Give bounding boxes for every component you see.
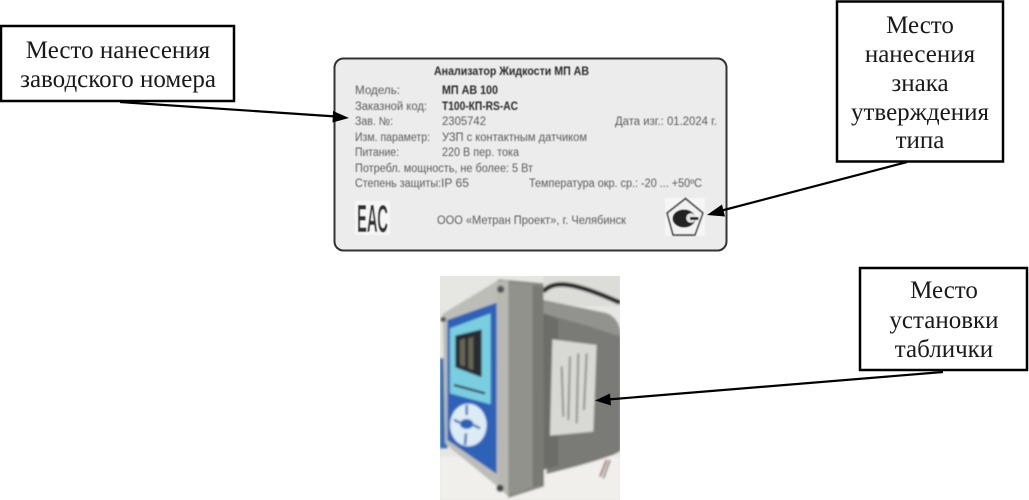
nameplate text: Модель: — [355, 85, 400, 97]
callout: serial number location: заводского номера — [20, 66, 216, 93]
nameplate text: 2305742 — [442, 116, 486, 128]
callout: type approval mark location: утверждения — [851, 99, 990, 126]
nameplate text: ООО «Метран Проект», г. Челябинск — [437, 215, 627, 227]
blue front — [447, 303, 497, 474]
panel: nameplate — [334, 58, 726, 250]
callout: type approval mark location: знака — [891, 70, 949, 97]
device body — [543, 300, 621, 474]
nameplate text: Изм. параметр: — [355, 132, 430, 144]
callout: plate installation location — [860, 268, 1027, 370]
arrow: to approval mark — [707, 162, 907, 216]
callout: type approval mark location: Место — [886, 12, 954, 39]
bezel — [442, 280, 500, 487]
nameplate text: Степень защиты: — [355, 178, 441, 190]
screen — [455, 329, 482, 377]
callout: plate installation location: Место — [910, 277, 978, 304]
side frame — [498, 279, 544, 498]
wires — [600, 460, 607, 477]
label on device — [550, 339, 597, 436]
nameplate text: Т100-КП-RS-AC — [442, 101, 518, 113]
left neighbour — [440, 358, 447, 448]
nameplate text: Питание: — [355, 147, 399, 159]
nameplate text: Потребл. мощность, не более: 5 Вт — [355, 163, 534, 175]
nameplate text: Дата изг.: 01.2024 г. — [615, 116, 717, 128]
nameplate text: IP 65 — [441, 178, 469, 190]
icon: EAC mark — [355, 198, 390, 241]
nameplate text: МП АВ 100 — [442, 85, 498, 97]
callout: serial number location — [1, 26, 234, 101]
nameplate text — [355, 66, 717, 227]
callout: type approval mark location: типа — [896, 127, 944, 154]
callout: serial number location: Место нанесения — [26, 37, 211, 64]
light panel — [450, 313, 491, 404]
nameplate text: 220 В пер. тока — [442, 147, 520, 159]
cable — [543, 284, 620, 303]
arrow: to serial number — [120, 102, 349, 122]
nameplate text: Зав. №: — [355, 116, 393, 128]
nameplate text: Анализатор Жидкости МП АВ — [434, 66, 589, 78]
nameplate text: Заказной код: — [355, 101, 427, 113]
nameplate text: УЗП с контактным датчиком — [442, 132, 587, 144]
keypad — [450, 404, 487, 446]
nameplate text: Температура окр. ср.: -20 ... +50ºС — [529, 178, 702, 190]
callout: plate installation location: таблички — [895, 336, 993, 363]
icon: type approval mark — [665, 198, 705, 236]
panel: nameplate: ЕАС — [357, 198, 388, 241]
photo: device with nameplate — [440, 276, 621, 500]
arrow: to plate on device — [595, 372, 943, 406]
callout: type approval mark location — [837, 2, 1003, 162]
callout: plate installation location: установки — [889, 307, 999, 334]
callout: type approval mark location: нанесения — [865, 41, 976, 68]
